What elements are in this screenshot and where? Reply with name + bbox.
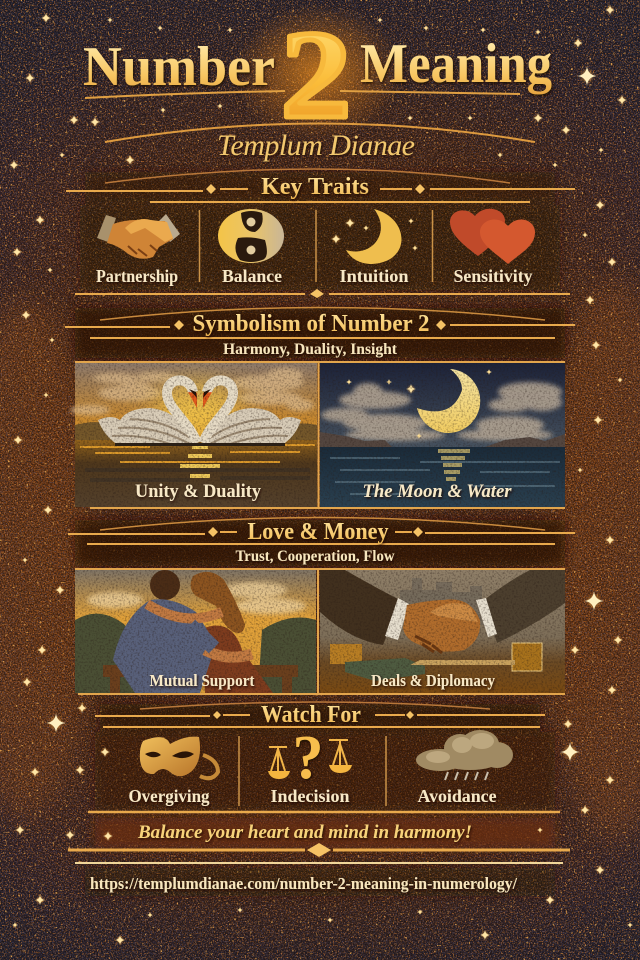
label: Intuition: Intuition xyxy=(340,266,408,286)
left sleeve xyxy=(320,570,400,645)
heading: Love & Money xyxy=(248,519,388,545)
ornamental divider with diamond xyxy=(68,843,570,863)
moon xyxy=(417,369,480,433)
caption: Deals & Diplomacy xyxy=(371,671,495,690)
small divider diamond xyxy=(310,289,324,298)
caption: Unity & Duality xyxy=(135,481,261,502)
brand name: Templum Dianae xyxy=(217,129,415,162)
clouds xyxy=(87,582,306,614)
image panel: couple xyxy=(75,569,316,693)
panel frame lines xyxy=(75,362,565,508)
sun glow xyxy=(155,384,239,440)
title word: Number: Number xyxy=(83,36,275,98)
section: Love & Money xyxy=(68,518,575,694)
water xyxy=(320,447,565,508)
water streaks xyxy=(330,451,560,494)
label: Sensitivity: Sensitivity xyxy=(454,266,532,286)
mountains xyxy=(320,432,565,447)
clouds xyxy=(321,382,562,441)
label: Indecision: Indecision xyxy=(270,786,350,806)
heading: Key Traits xyxy=(261,174,369,200)
title xyxy=(83,4,552,144)
icon: yin-yang balance xyxy=(218,209,284,263)
icon: mask xyxy=(140,737,218,778)
heading ornament xyxy=(95,702,545,727)
panel frame lines xyxy=(75,569,565,694)
dividers xyxy=(200,210,432,282)
city skyline xyxy=(400,578,492,625)
image panel: swans xyxy=(70,362,317,507)
hands xyxy=(403,599,480,653)
icon: two hearts xyxy=(450,209,535,264)
arms xyxy=(147,604,252,657)
swan bodies xyxy=(98,380,301,446)
image panel: moon and water xyxy=(320,362,565,508)
icon: right scale xyxy=(329,740,352,773)
clouds xyxy=(70,368,314,415)
icon: handshake xyxy=(97,214,180,259)
website url: https://templumdianae.com/number-2-meaning-in-numerology/ xyxy=(90,874,517,893)
distant hills xyxy=(75,422,317,440)
giant number 2: 2 xyxy=(281,5,351,144)
section bottom rule xyxy=(88,811,560,813)
caption: The Moon & Water xyxy=(362,481,512,502)
section: Symbolism of Number 2 xyxy=(65,308,575,508)
heading: Symbolism of Number 2 xyxy=(192,311,430,337)
caption: Mutual Support xyxy=(150,671,255,690)
water streaks xyxy=(80,445,315,480)
icon: question mark: ? xyxy=(292,724,324,792)
star sparkles xyxy=(406,384,416,394)
icon: crescent moon and stars xyxy=(331,209,418,264)
subheading: Harmony, Duality, Insight xyxy=(223,341,398,358)
man xyxy=(113,570,216,693)
trees xyxy=(75,614,316,693)
woman xyxy=(191,572,273,693)
right sleeve xyxy=(484,570,565,643)
title rule left xyxy=(85,91,285,98)
brand arc xyxy=(105,124,535,142)
dividers xyxy=(239,736,386,806)
brand: Templum Dianae xyxy=(105,124,535,162)
panel texture xyxy=(75,569,316,693)
right cuff xyxy=(476,598,497,637)
glow behind the number 2 xyxy=(234,4,402,140)
left cuff xyxy=(385,598,409,640)
section: Key Traits xyxy=(66,169,575,294)
section bottom rule xyxy=(75,293,570,295)
icon: left scale xyxy=(268,747,290,779)
bench xyxy=(103,665,298,693)
subheading: Trust, Cooperation, Flow xyxy=(236,548,395,565)
panel texture xyxy=(75,362,317,507)
heading ornament xyxy=(68,518,575,544)
heading ornament xyxy=(66,169,575,202)
label: Avoidance: Avoidance xyxy=(418,786,497,806)
table items xyxy=(330,643,542,681)
title rule right xyxy=(340,91,520,94)
label: Balance: Balance xyxy=(222,266,282,286)
closing message: Balance your heart and mind in harmony! xyxy=(137,822,472,843)
heading ornament xyxy=(65,308,575,338)
section: Watch For xyxy=(88,702,560,812)
icon: rain cloud xyxy=(416,730,513,780)
dark section bands xyxy=(75,172,565,896)
label: Partnership: Partnership xyxy=(96,266,178,286)
image panel: business handshake xyxy=(320,569,565,693)
title word: Meaning: Meaning xyxy=(360,33,552,95)
panel texture xyxy=(320,362,565,508)
heading: Watch For xyxy=(261,702,361,728)
label: Overgiving: Overgiving xyxy=(128,786,210,806)
water xyxy=(75,440,317,507)
panel texture xyxy=(320,569,565,693)
